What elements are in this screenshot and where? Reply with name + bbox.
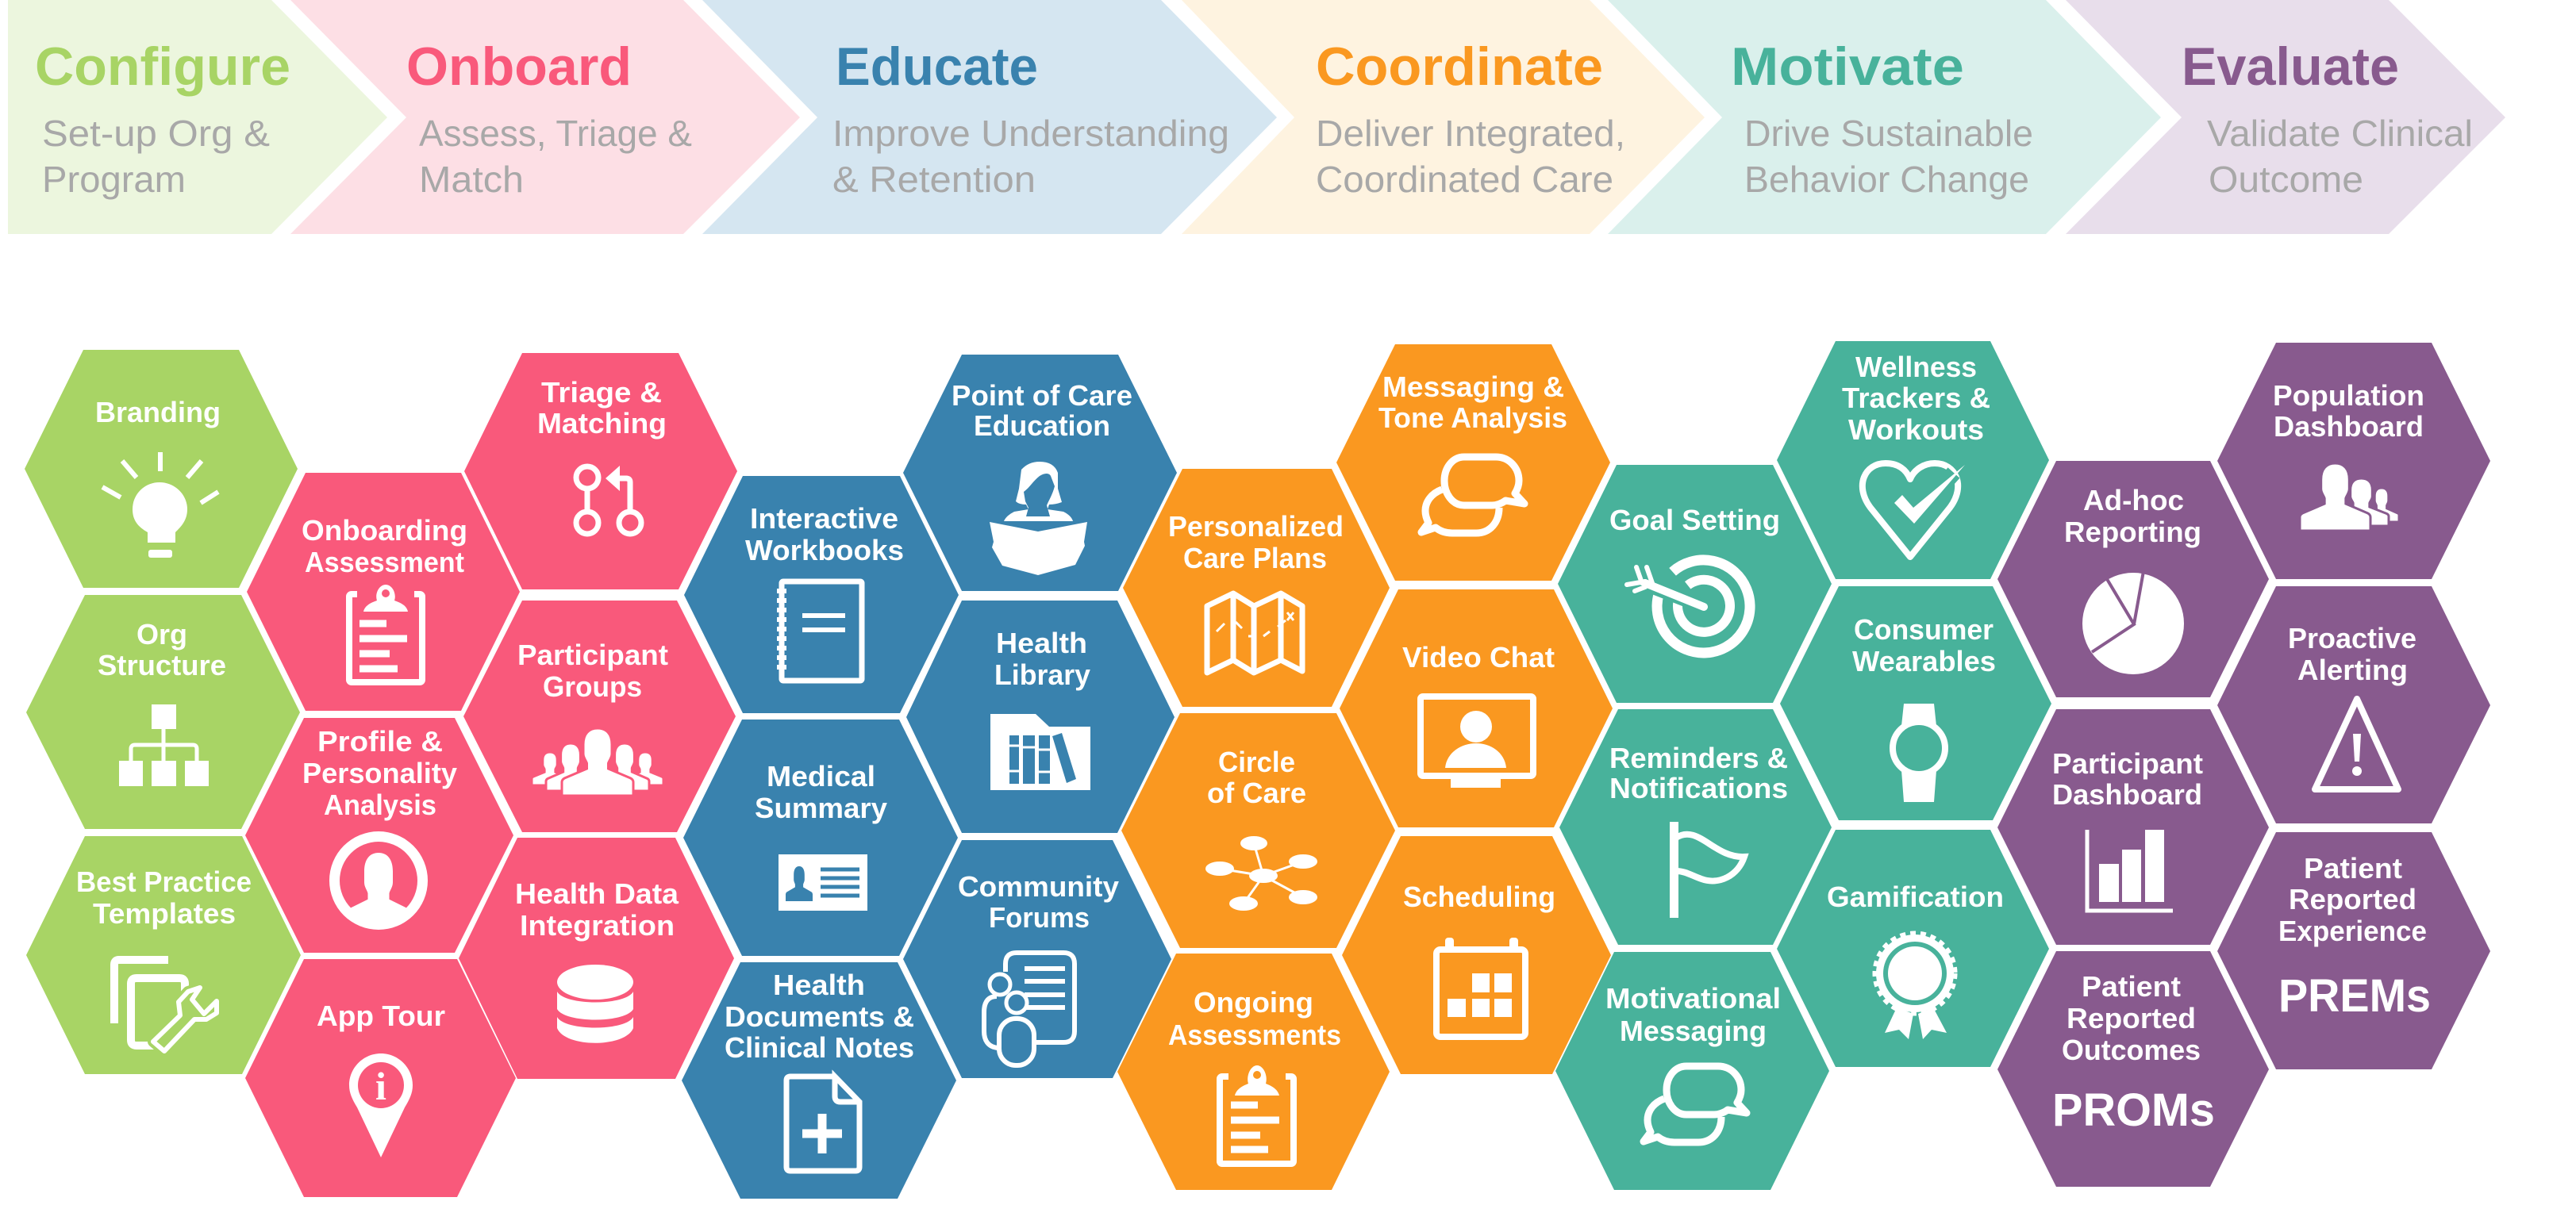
chevron: Educate: & Retention [832,159,1036,200]
hex: Wellness Trackers and Workouts [1777,341,2049,579]
chevron: Onboard: Match [419,159,524,200]
icon: database [557,965,633,1043]
hex: Circle of Care: of Care [1207,777,1306,809]
hex: Best Practice Templates [26,836,301,1074]
hex: Population Dashboard: Dashboard [2274,410,2424,443]
hex: Profile and Personality Analysis: Personality [302,757,457,789]
hex: Patient Reported Experience PREMs: Patient [2304,852,2402,885]
hex: Proactive Alerting [2217,586,2490,823]
icon: video monitor [1421,697,1533,788]
hex: Ad-hoc Reporting: Ad-hoc [2083,484,2184,516]
icon: speech bubbles [1644,1066,1747,1142]
hex: Patient Reported Outcomes PROMs: Reported [2067,1002,2196,1034]
hex: Ad-hoc Reporting [1997,461,2269,697]
hex: Motivational Messaging: Messaging [1620,1015,1767,1047]
icon: profile circle [329,831,428,931]
hex: Triage and Matching: Triage & [541,376,662,409]
hex: Personalized Care Plans [1123,469,1390,707]
hex: Community Forums: Community [958,870,1119,903]
icon: warning triangle [2315,699,2398,789]
hex: Best Practice Templates: Templates [93,897,236,930]
hex: Reminders and Notifications: Reminders & [1609,742,1788,774]
hex: Participant Dashboard: Dashboard [2052,778,2202,811]
hex: App Tour: App Tour [317,1000,445,1032]
hex: Interactive Workbooks: Interactive [750,502,898,535]
icon: people and document [984,953,1075,1065]
icon: org chart [119,704,209,786]
icon: person reading book [990,462,1087,575]
hex: Health Documents and Clinical Notes: Clinical Notes [725,1031,914,1064]
hex: Point of Care Education [903,355,1177,591]
hex: Wellness Trackers and Workouts: Trackers & [1842,382,1990,414]
hex: Patient Reported Experience PREMs: Reported [2289,883,2416,915]
hex: Consumer Wearables: Wearables [1852,645,1996,677]
hex: Interactive Workbooks: Workbooks [745,534,904,566]
icon: ID card [779,854,867,911]
hex: Onboarding Assessment [247,473,520,711]
icon: award ribbon [1874,933,1955,1039]
hex: Branding: Branding [95,396,221,428]
hex: Branding [25,350,298,588]
hex: Consumer Wearables [1780,586,2051,820]
chevron: Coordinate [1182,0,1705,234]
hex: Messaging and Tone Analysis [1336,344,1610,581]
hex: Consumer Wearables: Consumer [1854,613,1994,646]
icon: smart watch [1893,704,1945,802]
hex: Triage and Matching: Matching [537,407,667,439]
hex: Org Structure [26,595,300,829]
hex: Point of Care Education: Point of Care [952,379,1132,412]
hex: Interactive Workbooks [684,476,959,713]
icon: notebook [777,581,862,681]
icon: light bulb [102,452,218,558]
hex: Health Data Integration: Health Data [515,877,679,910]
icon: calendar [1436,938,1525,1037]
hex: Proactive Alerting: Alerting [2297,654,2408,686]
hex: Participant Dashboard [1997,709,2269,945]
hex: Patient Reported Experience PREMs: PREMs [2278,970,2431,1022]
icon: clipboard [1220,1065,1294,1164]
chevron: Configure: Set-up Org & [42,113,270,154]
icon: clipboard [349,583,422,682]
hex: Circle of Care: Circle [1218,746,1295,778]
hex: Scheduling: Scheduling [1403,881,1555,913]
hex: Profile and Personality Analysis: Analysis [324,789,436,821]
hex: Messaging and Tone Analysis: Tone Analysis [1378,401,1567,434]
hex: Medical Summary: Medical [767,760,875,792]
hex: Ongoing Assessments [1117,954,1390,1190]
hex: Motivational Messaging: Motivational [1605,982,1781,1015]
hex: Patient Reported Outcomes PROMs [1997,951,2269,1187]
icon: target with arrow [1627,560,1750,653]
hex: Onboarding Assessment: Assessment [305,546,464,578]
hex: Population Dashboard: Population [2273,379,2424,412]
hex: Population Dashboard [2217,343,2490,579]
hex: Scheduling [1342,836,1611,1074]
hex: Health Documents and Clinical Notes: Documents & [725,1000,914,1033]
hex: Profile and Personality Analysis [245,718,513,953]
hex: Gamification: Gamification [1827,881,2004,913]
hex: Health Library: Library [994,658,1090,691]
icon: group of people [532,728,663,796]
icon: bar chart [2087,830,2173,911]
icon: templates and wrench [114,960,217,1051]
hex: Community Forums: Forums [989,901,1090,934]
hex: Medical Summary [683,720,958,956]
chevron: Evaluate [2066,0,2505,234]
hex: Reminders and Notifications [1559,709,1832,945]
icon: document with plus [786,1076,859,1171]
chevron: Evaluate: Evaluate [2182,36,2399,97]
hex: Patient Reported Outcomes PROMs: Outcomes [2062,1034,2201,1066]
hex: Ongoing Assessments: Assessments [1168,1019,1341,1051]
hex: Best Practice Templates: Best Practice [76,865,252,898]
hex: Messaging and Tone Analysis: Messaging & [1382,370,1564,403]
icon: branch arrows [576,466,641,534]
icon: folded map [1207,593,1302,673]
hex: Gamification [1777,830,2049,1067]
icon: book folder [990,714,1090,790]
chevron: Coordinate: Deliver Integrated, [1316,113,1625,154]
hex: Health Data Integration: Integration [520,909,675,942]
hex: Proactive Alerting: Proactive [2288,622,2416,654]
hex: Health Documents and Clinical Notes: Health [773,969,865,1001]
icon: three people [2300,463,2399,531]
hex: Video Chat: Video Chat [1402,641,1555,673]
hex: Motivational Messaging [1555,952,1829,1190]
chevron: Motivate [1608,0,2161,234]
hex: Community Forums [903,840,1171,1078]
chevron: Motivate: Motivate [1731,36,1964,97]
hex: App Tour [245,959,516,1197]
icon: speech bubbles [1421,457,1524,533]
hex: Circle of Care [1121,713,1395,948]
hex: Goal Setting [1558,465,1832,703]
icon: map pin [349,1053,413,1157]
chevron: Onboard: Assess, Triage & [419,113,692,154]
chevron: Motivate: Behavior Change [1744,159,2029,200]
hex: Point of Care Education: Education [974,409,1110,442]
chevron: Configure: Configure [35,36,290,97]
icon: heart with check [1863,463,1965,557]
icon: care network [1205,836,1317,911]
hex: Org Structure: Structure [98,649,226,681]
icon: pie chart [2082,571,2184,674]
hex: Health Data Integration [459,838,734,1079]
hex: Onboarding Assessment: Onboarding [302,514,467,547]
hex: Ad-hoc Reporting: Reporting [2064,516,2201,548]
hex: Patient Reported Outcomes PROMs: Patient [2082,970,2181,1003]
hex: Video Chat [1340,589,1613,827]
chevron: Educate: Educate [836,36,1038,97]
hex: Wellness Trackers and Workouts: Wellness [1855,351,1977,383]
hex: Personalized Care Plans: Personalized [1168,510,1344,543]
hex: Medical Summary: Summary [755,792,887,824]
chevron: Coordinate: Coordinated Care [1316,159,1613,200]
hex: Participant Groups: Groups [543,670,642,703]
chevron: Onboard: Onboard [406,36,632,97]
icon: flag [1670,822,1744,918]
chevron: Evaluate: Outcome [2209,159,2363,200]
hex: Wellness Trackers and Workouts: Workouts [1848,413,1984,446]
hex: Patient Reported Experience PREMs [2217,832,2490,1069]
chevron: Educate [702,0,1277,234]
hex: Participant Groups: Participant [517,639,668,671]
chevron: Configure: Program [42,159,186,200]
icon: map pin: i [375,1064,386,1108]
chevron: Onboard [290,0,800,234]
hex: Personalized Care Plans: Care Plans [1183,542,1327,574]
chevron: Evaluate: Validate Clinical [2207,113,2473,154]
hex: Health Documents and Clinical Notes [682,962,956,1199]
hex: Reminders and Notifications: Notifications [1609,772,1788,804]
hex: Ongoing Assessments: Ongoing [1194,986,1313,1019]
chevron: Configure [8,0,387,234]
hex: Health Library [906,601,1175,833]
hex: Profile and Personality Analysis: Profile & [317,725,443,758]
hex: Patient Reported Experience PREMs: Experience [2278,915,2427,947]
hex: Patient Reported Outcomes PROMs: PROMs [2052,1084,2215,1136]
chevron: Coordinate: Coordinate [1316,36,1603,97]
chevron: Motivate: Drive Sustainable [1744,113,2033,154]
hex: Goal Setting: Goal Setting [1609,504,1780,536]
chevron: Educate: Improve Understanding [832,113,1229,154]
hex: Org Structure: Org [136,618,187,650]
hex: Health Library: Health [996,627,1087,659]
hex: Participant Groups [463,601,736,832]
hex: Participant Dashboard: Participant [2052,747,2203,780]
hex: Triage and Matching [464,353,737,589]
